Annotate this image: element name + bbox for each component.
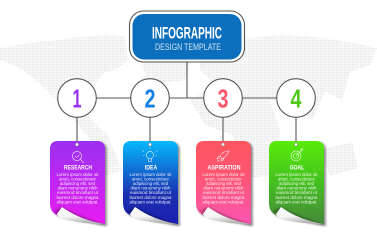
number circle 3 — [204, 79, 242, 117]
icon: light bulb — [142, 148, 158, 162]
title box — [130, 11, 244, 62]
number circle 4: 4 — [290, 84, 302, 114]
icon: rocket — [217, 151, 229, 162]
panel: aspiration — [196, 141, 254, 226]
panel: idea — [123, 141, 181, 226]
body text — [276, 172, 318, 204]
number circle 2: 2 — [144, 84, 156, 114]
panel: goal — [269, 141, 327, 226]
subtitle: DESIGN TEMPLATE — [155, 42, 221, 52]
panel: research — [50, 141, 108, 226]
body text — [202, 172, 245, 204]
body text — [56, 172, 99, 204]
heading: GOAL — [290, 164, 304, 172]
icon: magnifier — [72, 151, 84, 163]
world map dotted background — [0, 36, 377, 178]
title text: INFOGRAPHIC — [152, 24, 222, 42]
icon: target — [291, 148, 303, 161]
heading: RESEARCH — [64, 164, 92, 172]
connector lines — [77, 62, 296, 144]
number circle 3: 3 — [218, 84, 228, 114]
body text — [130, 172, 172, 204]
number circle 1 — [58, 79, 96, 117]
number circle 4 — [277, 79, 315, 117]
heading: ASPIRATION — [208, 164, 241, 172]
number circle 1: 1 — [72, 84, 82, 114]
number circle 2 — [131, 79, 169, 117]
heading: IDEA — [145, 164, 158, 172]
